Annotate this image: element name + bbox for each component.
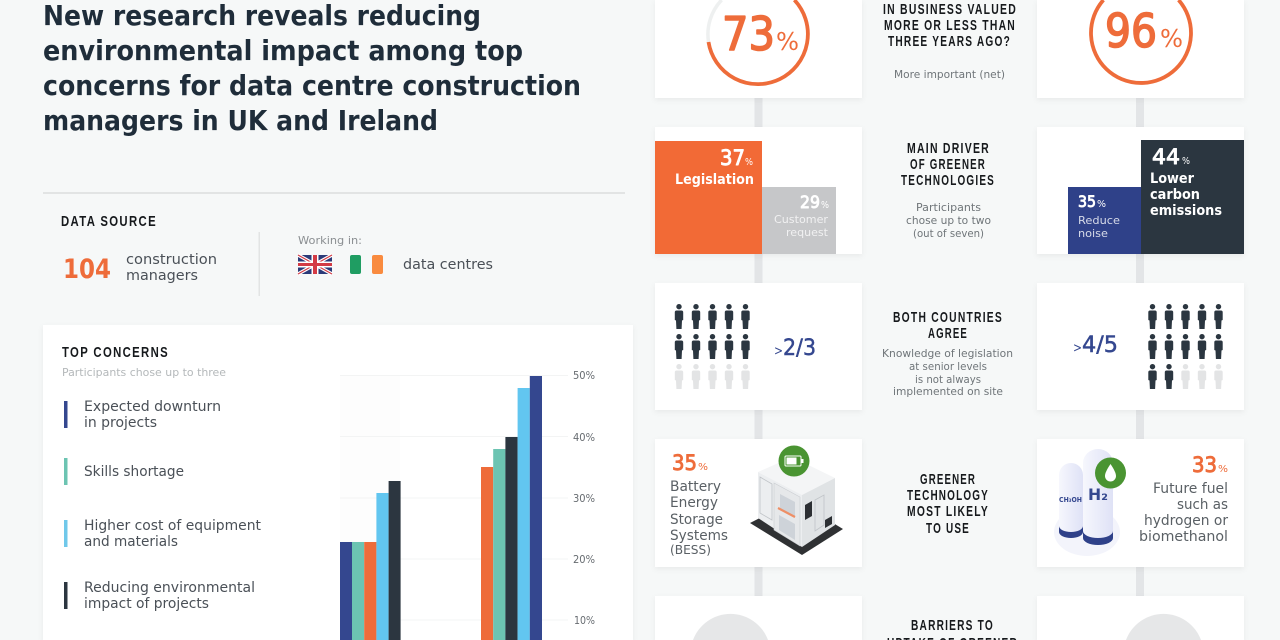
icon: UK flag — [298, 255, 332, 274]
value 35%: % — [698, 462, 708, 473]
legend: reducing environmental impact — [64, 580, 255, 612]
value: more than 4/5: 4/5 — [1082, 333, 1118, 358]
stat: 104 construction managers: 104 — [63, 254, 111, 285]
block: legislation 37%: % — [745, 157, 753, 168]
row heading: both countries agree: implemented on site — [893, 385, 1003, 398]
row heading: main driver: OF GREENER — [910, 156, 986, 173]
block: customer request 29%: request — [786, 226, 829, 239]
label: future fuel: hydrogen or — [1144, 513, 1228, 529]
row heading: main driver: MAIN DRIVER — [907, 140, 990, 157]
row heading: value in business: MORE OR LESS THAN — [884, 17, 1016, 34]
row: greener technology — [655, 439, 1244, 567]
row: importance of environmental impact — [655, 0, 1244, 98]
value 33%: 33 — [1192, 453, 1217, 477]
bars: first group — [340, 481, 401, 640]
icon: people grid 4/5 — [1148, 304, 1223, 389]
icon: green drop badge — [1095, 458, 1126, 488]
block: customer request 29%: % — [821, 200, 829, 211]
row heading: greener technology: TECHNOLOGY — [907, 487, 989, 504]
working in label: Working in: — [298, 234, 362, 247]
axis labels: 40% — [573, 432, 595, 444]
icon: grey badge — [693, 614, 768, 640]
row: both countries agree — [655, 283, 1244, 410]
row heading: main driver: TECHNOLOGIES — [901, 172, 995, 189]
row heading: both countries agree: Knowledge of legislation — [882, 347, 1013, 360]
value 96%: % — [1160, 24, 1183, 53]
card: Ireland drivers — [1037, 127, 1244, 254]
legend: higher cost: Higher cost of equipment — [84, 518, 262, 534]
legend: expected downturn: Expected downturn — [84, 399, 221, 415]
block: customer request 29% — [762, 187, 836, 254]
legend: skills shortage — [64, 458, 184, 485]
connectors — [754, 95, 1144, 605]
row heading: value in business — [883, 1, 1017, 81]
row heading: barriers — [887, 617, 1018, 640]
legend: reducing environmental impact: impact of projects — [84, 596, 209, 612]
card: UK drivers — [655, 127, 862, 254]
block: reduce noise 35%: noise — [1078, 227, 1108, 240]
ring chart 96% — [1091, 0, 1191, 83]
card: Ireland more than four fifths — [1037, 283, 1244, 410]
stat: 104 construction managers: construction — [126, 252, 217, 268]
row heading: both countries agree: is not always — [915, 373, 981, 386]
value 96%: 96 — [1105, 4, 1157, 58]
row heading: both countries agree: at senior levels — [909, 360, 987, 373]
label: battery energy storage systems: Systems — [670, 528, 728, 544]
row heading: main driver: chose up to two — [906, 214, 991, 227]
value 35%: 35 — [672, 451, 697, 475]
card: UK barriers — [655, 596, 862, 640]
icon: fuel tanks — [1054, 449, 1126, 556]
block: legislation 37% — [655, 141, 762, 254]
row heading: value in business: THREE YEARS AGO? — [888, 33, 1011, 50]
panel: data source — [61, 213, 493, 296]
block: legislation 37%: 37 — [720, 146, 745, 170]
row heading: both countries agree: BOTH COUNTRIES — [893, 309, 1003, 326]
block: reduce noise 35%: Reduce — [1078, 214, 1120, 227]
bars: second group — [481, 376, 542, 640]
axis labels: 10% — [574, 615, 595, 627]
label: battery energy storage systems: Energy — [670, 495, 718, 511]
row: barriers — [655, 596, 1244, 640]
note: participants chose up to three: Participants chose up to three — [62, 367, 226, 379]
card: Ireland 96% — [1037, 0, 1244, 98]
block: customer request 29%: Customer — [774, 213, 828, 226]
block: legislation 37%: Legislation — [675, 172, 754, 188]
block: reduce noise 35% — [1068, 187, 1141, 254]
value 33%: % — [1218, 464, 1228, 475]
block: reduce noise 35%: % — [1097, 199, 1106, 210]
row heading: main driver: Participants — [916, 201, 981, 214]
block: lower carbon emissions 44%: 44 — [1152, 145, 1180, 169]
axis labels: 30% — [573, 493, 595, 505]
legend: expected downturn — [64, 399, 221, 431]
icon: grey badge — [1126, 614, 1201, 640]
axis labels: 50% — [573, 370, 595, 382]
block: lower carbon emissions 44%: carbon — [1150, 187, 1200, 203]
row heading: value in business: IN BUSINESS VALUED — [883, 1, 1017, 18]
label: battery energy storage systems — [670, 479, 728, 557]
label: battery energy storage systems: Storage — [670, 512, 723, 528]
stat: 104 construction managers — [63, 252, 217, 285]
value: more than 2/3: 2/3 — [783, 336, 816, 361]
label: future fuel: Future fuel — [1153, 481, 1228, 497]
bar chart — [340, 370, 595, 640]
row heading: greener technology: GREENER — [920, 471, 976, 488]
row heading: main driver — [901, 140, 995, 240]
title — [43, 0, 581, 137]
block: customer request 29%: 29 — [800, 193, 820, 213]
heading: data source: DATA SOURCE — [61, 213, 157, 230]
row: main driver — [655, 127, 1244, 254]
title: managers in UK and Ireland — [43, 104, 438, 137]
data centres label: data centres — [403, 257, 493, 273]
axis labels: 20% — [573, 554, 595, 566]
row heading: value in business: More important (net) — [894, 68, 1005, 81]
label: future fuel: such as — [1177, 497, 1228, 513]
axis labels — [573, 370, 595, 627]
icon: Ireland flag — [350, 255, 383, 274]
legend: higher cost: and materials — [84, 534, 178, 550]
row heading: greener technology: MOST LIKELY — [907, 503, 989, 520]
value 73%: % — [776, 27, 799, 56]
block: reduce noise 35%: 35 — [1078, 192, 1096, 211]
value: more than 4/5: > — [1073, 341, 1082, 356]
value 73%: 73 — [722, 7, 775, 61]
ring chart 73% — [708, 0, 808, 84]
row heading: main driver: (out of seven) — [913, 227, 984, 240]
row heading: both countries agree — [882, 309, 1013, 398]
row heading: greener technology: TO USE — [926, 520, 970, 537]
label: H2: H₂ — [1088, 485, 1108, 504]
label: future fuel: biomethanol — [1139, 529, 1228, 545]
title: concerns for data centre construction — [43, 69, 581, 102]
label: battery energy storage systems: (BESS) — [670, 542, 711, 557]
value: more than 2/3: > — [774, 344, 783, 359]
label: battery energy storage systems: Battery — [670, 479, 721, 495]
row heading: greener technology — [907, 471, 989, 537]
label: future fuel — [1139, 481, 1228, 545]
heading: top concerns: TOP CONCERNS — [62, 344, 169, 361]
card: UK 73% — [655, 0, 862, 98]
card: Ireland barriers — [1037, 596, 1244, 640]
block: lower carbon emissions 44%: % — [1182, 156, 1190, 167]
panel: top concerns — [43, 325, 633, 640]
legend: higher cost — [64, 518, 262, 550]
icon: people grid 2/3 — [675, 304, 750, 389]
icon: battery storage unit — [750, 446, 843, 555]
card: UK more than two thirds — [655, 283, 862, 410]
card: future fuel — [1037, 439, 1244, 567]
block: lower carbon emissions 44%: Lower — [1150, 171, 1194, 187]
label: CH3OH: CH₃OH — [1059, 496, 1082, 504]
legend — [64, 399, 262, 612]
card: BESS — [655, 439, 862, 567]
icon: green battery badge — [778, 446, 810, 476]
legend: reducing environmental impact: Reducing environmental — [84, 580, 255, 596]
stat: 104 construction managers: managers — [126, 268, 198, 284]
block: lower carbon emissions 44% — [1141, 140, 1244, 254]
title: environmental impact among top — [43, 34, 523, 67]
row heading: both countries agree: AGREE — [928, 325, 968, 342]
legend: skills shortage: Skills shortage — [84, 464, 184, 480]
legend: expected downturn: in projects — [84, 415, 157, 431]
block: lower carbon emissions 44%: emissions — [1150, 203, 1222, 219]
row heading: barriers: BARRIERS TO — [911, 617, 994, 634]
